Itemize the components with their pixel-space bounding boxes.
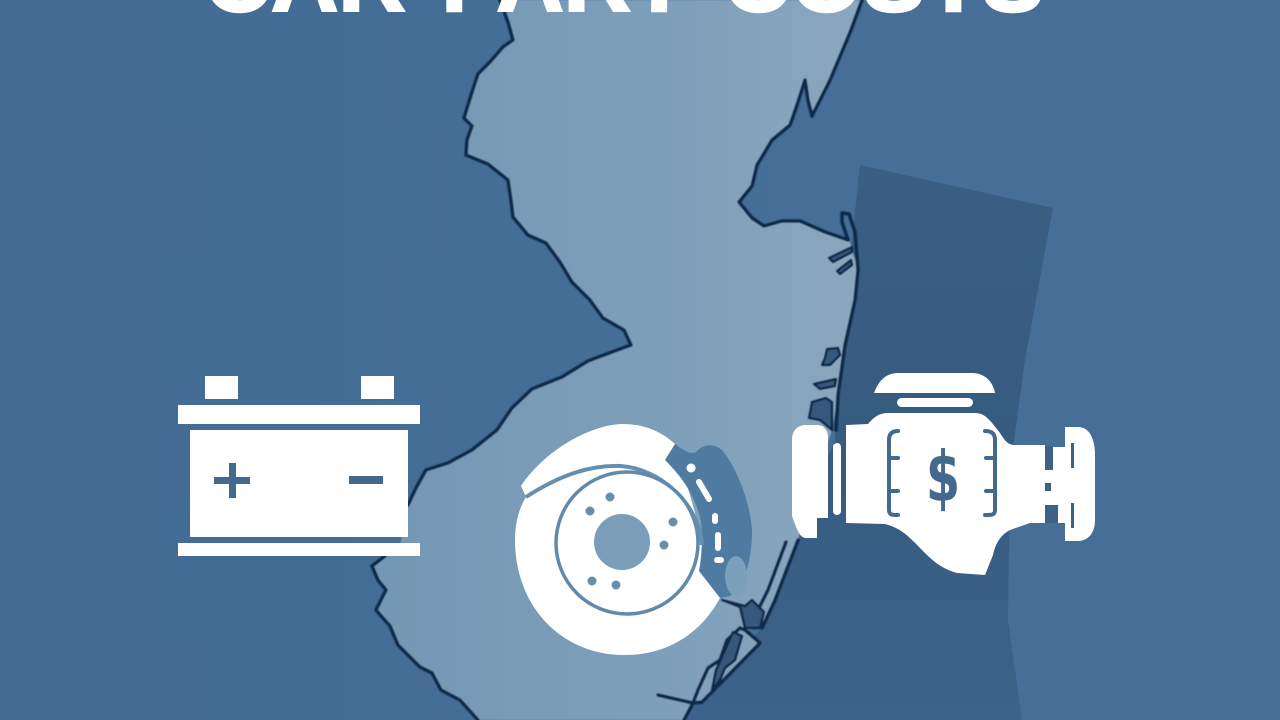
coastline: bay inlets and islands	[712, 247, 852, 690]
dark offshore block	[680, 165, 1053, 720]
icon: car battery	[178, 376, 420, 556]
icon: brake disc and caliper	[515, 424, 752, 655]
map: state land shape	[372, 0, 862, 720]
belt	[833, 443, 841, 515]
caliper	[665, 444, 752, 598]
engine cover	[874, 373, 995, 393]
coastline: northeast shore and bay	[739, 0, 862, 240]
coastline: lower western boundary	[372, 556, 478, 720]
front pulley	[792, 425, 828, 538]
coastline: southern tip	[658, 695, 693, 720]
bolt holes	[586, 492, 678, 590]
engine brackets	[889, 431, 995, 515]
hub	[594, 514, 650, 570]
coastline: barrier shore	[693, 213, 858, 703]
icon: engine with dollar sign	[792, 373, 1095, 575]
coastline: western boundary	[408, 0, 631, 505]
plus terminal	[214, 463, 250, 498]
dollar sign: $	[926, 438, 960, 518]
rear notches	[1045, 443, 1074, 528]
caliper pad highlight	[725, 556, 747, 596]
disc	[515, 424, 720, 655]
engine block	[846, 413, 1068, 575]
inner ring	[556, 472, 698, 614]
rear cap	[1065, 427, 1095, 541]
groove	[526, 466, 702, 545]
minus terminal	[349, 476, 383, 484]
caliper dashes	[691, 468, 721, 560]
